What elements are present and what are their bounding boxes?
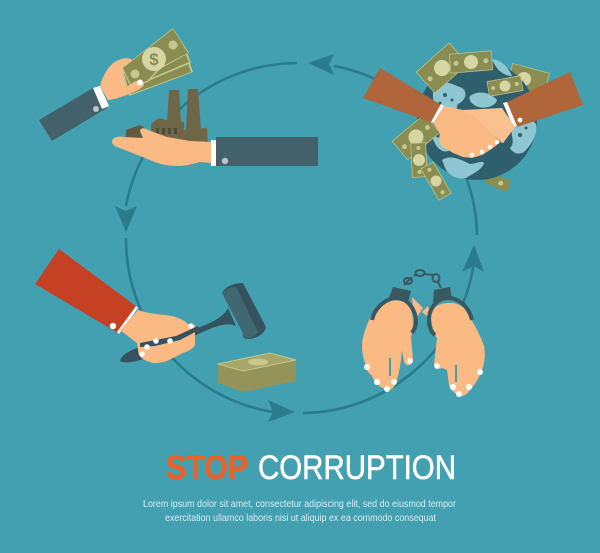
cuff and button [110, 306, 138, 334]
factory [126, 89, 208, 148]
globe [417, 59, 537, 180]
title word: CORRUPTION: CORRUPTION [258, 449, 456, 487]
left hand [362, 301, 413, 390]
scene: handcuffed hands [362, 270, 485, 397]
hand gripping gavel [120, 310, 195, 363]
thumb [122, 81, 144, 96]
scene: gavel [35, 249, 266, 363]
sleeve: upper arm [39, 88, 107, 141]
button [222, 158, 228, 164]
sleeve: lower arm [216, 137, 318, 166]
money stack [218, 353, 296, 392]
title word: STOP: STOP [166, 449, 248, 487]
shaking hands [433, 106, 515, 158]
finger gaps [390, 358, 456, 382]
cycle of arc arrows [115, 54, 484, 422]
wrists [412, 297, 432, 322]
banknotes around globe [392, 43, 523, 200]
handcuffs [372, 270, 472, 335]
scene: bribe over factory [39, 28, 318, 166]
body text [143, 498, 456, 524]
right hand [431, 303, 485, 396]
cuffs [431, 102, 522, 127]
banknotes [122, 28, 193, 96]
sleeve: red [35, 249, 137, 333]
gavel [120, 283, 266, 362]
open hand [112, 128, 211, 166]
title [166, 449, 456, 487]
handle over palm [140, 326, 199, 347]
scene: handshake over globe [363, 43, 583, 200]
hand holding money [100, 58, 146, 100]
banknotes: $ [149, 50, 159, 69]
fingernails [364, 358, 483, 397]
note behind globe [507, 63, 549, 97]
body text: Lorem ipsum dolor sit amet, consectetur adipiscing elit, sed do eiusmod tempor [143, 498, 456, 510]
sleeve: left brown [363, 68, 443, 123]
cuff and button [93, 86, 109, 112]
sleeve: right brown [505, 72, 583, 127]
body text: exercitation ullamco laboris nisi ut aliquip ex ea commodo consequat [165, 512, 436, 524]
cuff: lower arm [211, 140, 216, 166]
fingernails [139, 323, 194, 357]
note behind globe bottom [485, 171, 511, 193]
